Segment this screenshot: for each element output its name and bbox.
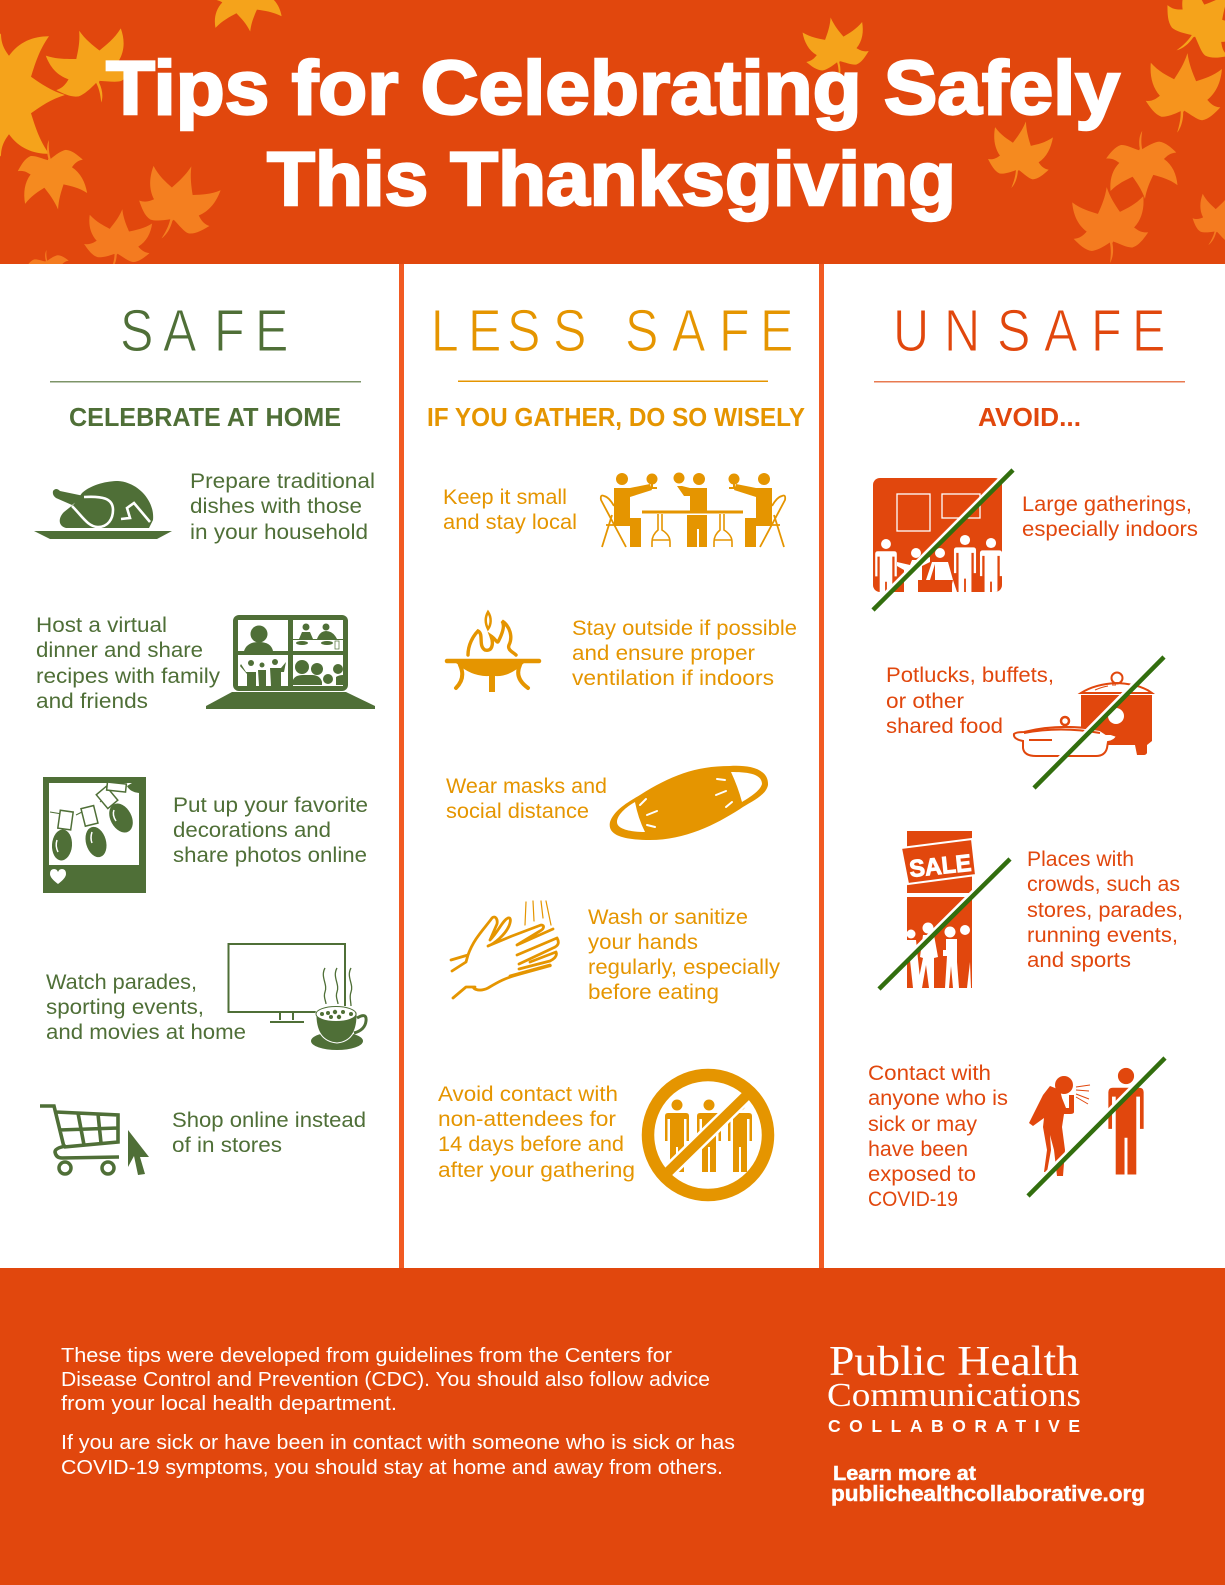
footer text: stay home note: COVID-19 symptoms, you should stay at home and away from others.	[61, 1456, 723, 1479]
text: avoid contact: Avoid contact with	[438, 1082, 618, 1106]
heading: unsafe: UNSAFE	[893, 297, 1165, 364]
text: host a virtual dinner: recipes with family	[36, 664, 220, 688]
logo: public health communications collaborative: COLLABORATIVE	[828, 1416, 1080, 1436]
header banner	[0, 0, 1225, 264]
title	[106, 46, 1120, 222]
footer text: guidelines note: Disease Control and Prevention (CDC). You should also follow advice	[61, 1368, 710, 1391]
text: keep it small: Keep it small	[443, 485, 567, 509]
text: stay outside: and ensure proper	[572, 641, 755, 665]
call to action: learn more	[831, 1463, 1145, 1506]
text: avoid contact: 14 days before and	[438, 1132, 624, 1156]
text: contact with sick: COVID-19	[868, 1187, 958, 1211]
text: places with crowds	[1027, 847, 1183, 972]
text: host a virtual dinner: Host a virtual	[36, 613, 167, 637]
text: contact with sick: exposed to	[868, 1162, 976, 1186]
text: places with crowds: Places with	[1027, 847, 1134, 871]
text: places with crowds: crowds, such as	[1027, 872, 1180, 896]
text: stay outside: Stay outside if possible	[572, 616, 797, 640]
icon: tv and cocoa	[228, 944, 366, 1050]
text: wash hands: regularly, especially	[588, 955, 780, 979]
text: wash hands: before eating	[588, 980, 719, 1004]
text: potlucks	[886, 663, 1054, 738]
call to action: learn more: publichealthcollaborative.org	[831, 1481, 1145, 1506]
logo: public health communications collaborative: Communications	[827, 1377, 1081, 1414]
icon: face mask	[610, 766, 768, 840]
text: watch parades: Watch parades,	[46, 970, 197, 994]
text: prepare traditional dishes: dishes with those	[190, 494, 362, 518]
text: wear masks: Wear masks and	[446, 774, 607, 798]
text: watch parades	[46, 970, 246, 1044]
footer text: guidelines note: from your local health department.	[61, 1392, 397, 1415]
icon: crowded store sale: SALE	[908, 850, 973, 883]
icon: shared food pots	[1014, 655, 1164, 788]
text: stay outside	[572, 616, 797, 690]
icon: fire pit	[447, 612, 539, 692]
icon: no contact sign	[648, 1075, 768, 1195]
icon: large indoor gathering	[871, 468, 1013, 610]
text: decorations: Put up your favorite	[173, 793, 368, 817]
text: shop online: Shop online instead	[172, 1108, 366, 1132]
text: prepare traditional dishes	[190, 469, 375, 544]
text: wash hands: Wash or sanitize	[588, 905, 748, 929]
text: wash hands: your hands	[588, 930, 698, 954]
subheading: if you gather: IF YOU GATHER, DO SO WISELY	[427, 402, 805, 432]
panel: safe	[34, 297, 375, 1175]
footer text: guidelines note	[61, 1344, 710, 1415]
text: contact with sick: anyone who is	[868, 1086, 1008, 1110]
icon: laptop video call	[206, 615, 375, 709]
text: host a virtual dinner	[36, 613, 220, 713]
text: decorations	[173, 793, 368, 867]
icon: shopping cart and cursor	[40, 1106, 149, 1175]
autumn leaves	[0, 0, 1225, 294]
text: host a virtual dinner: and friends	[36, 689, 148, 713]
subheading: celebrate at home: CELEBRATE AT HOME	[69, 402, 341, 432]
heading: less safe: LESS SAFE	[431, 297, 793, 364]
text: large gatherings: Large gatherings,	[1022, 492, 1192, 516]
text: host a virtual dinner: dinner and share	[36, 638, 203, 662]
icon: washing hands	[451, 901, 558, 998]
text: potlucks: or other	[886, 689, 964, 713]
icon: crowded store sale	[877, 831, 1010, 989]
text: shop online	[172, 1108, 366, 1157]
text: watch parades: sporting events,	[46, 995, 204, 1019]
title: Tips for Celebrating Safely	[106, 46, 1120, 131]
text: places with crowds: and sports	[1027, 948, 1131, 972]
footer text: stay home note: If you are sick or have been in contact with someone who is sick or has	[61, 1431, 735, 1454]
text: keep it small	[443, 485, 577, 534]
call to action: learn more: Learn more at	[833, 1463, 976, 1485]
panel: unsafe	[868, 297, 1198, 1211]
column divider left	[399, 264, 404, 1268]
icon: turkey	[34, 481, 172, 539]
text: avoid contact: after your gathering	[438, 1158, 635, 1182]
logo: public health communications collaborative	[827, 1339, 1081, 1436]
text: watch parades: and movies at home	[46, 1020, 246, 1044]
subheading: avoid: AVOID...	[978, 402, 1081, 432]
heading: safe: SAFE	[120, 297, 288, 364]
text: potlucks: Potlucks, buffets,	[886, 663, 1054, 687]
text: prepare traditional dishes: in your household	[190, 520, 368, 544]
text: keep it small: and stay local	[443, 510, 577, 534]
text: wash hands	[588, 905, 780, 1004]
text: stay outside: ventilation if indoors	[572, 666, 774, 690]
text: contact with sick: Contact with	[868, 1061, 991, 1085]
text: avoid contact: non-attendees for	[438, 1107, 616, 1131]
icon: coughing person and bystander	[1026, 1056, 1165, 1196]
text: places with crowds: running events,	[1027, 923, 1178, 947]
logo: public health communications collaborative: Public Health	[829, 1339, 1079, 1385]
footer text: guidelines note: These tips were developed from guidelines from the Centers for	[61, 1344, 672, 1367]
column divider right	[819, 264, 824, 1268]
footer band	[0, 1268, 1225, 1585]
text: places with crowds: stores, parades,	[1027, 898, 1183, 922]
text: large gatherings	[1022, 492, 1198, 541]
text: decorations: share photos online	[173, 843, 367, 867]
text: avoid contact	[438, 1082, 635, 1182]
icon: people at table	[601, 472, 785, 547]
text: prepare traditional dishes: Prepare traditional	[190, 469, 375, 493]
text: large gatherings: especially indoors	[1022, 517, 1198, 541]
text: contact with sick	[868, 1061, 1008, 1211]
panel: less safe	[427, 297, 805, 1195]
text: shop online: of in stores	[172, 1133, 282, 1157]
text: potlucks: shared food	[886, 714, 1003, 738]
footer text: stay home note	[61, 1431, 735, 1479]
title: This Thanksgiving	[267, 137, 956, 222]
text: decorations: decorations and	[173, 818, 331, 842]
text: contact with sick: sick or may	[868, 1112, 977, 1136]
text: contact with sick: have been	[868, 1137, 968, 1161]
text: wear masks	[446, 774, 607, 823]
text: wear masks: social distance	[446, 799, 589, 823]
icon: photo with string lights	[43, 777, 146, 893]
